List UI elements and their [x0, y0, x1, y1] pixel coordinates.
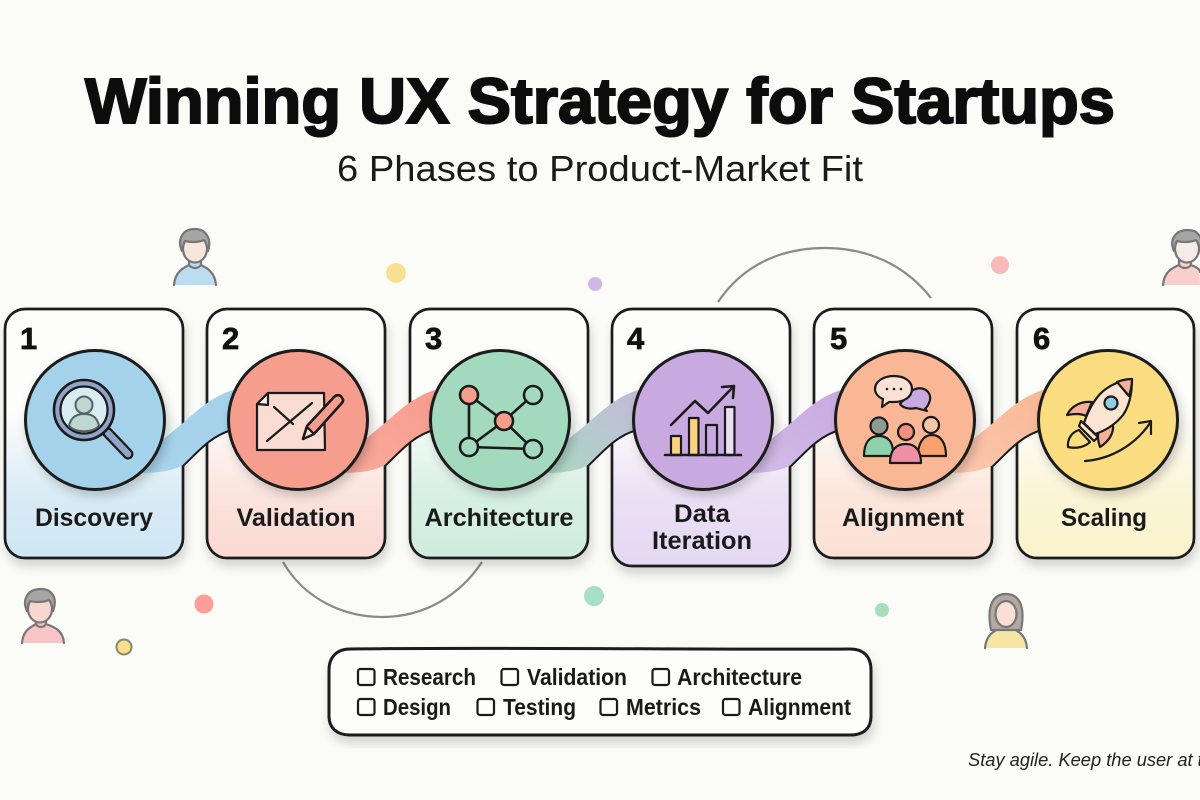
checklist item Architecture: Architecture — [677, 664, 802, 690]
panel: phase 1 discovery — [5, 309, 183, 558]
user avatar bottom left — [22, 589, 64, 643]
accent dots — [116, 256, 1009, 654]
label: Discovery: Discovery — [35, 504, 153, 532]
decorative arc bottom — [283, 562, 482, 617]
step number 5: 5 — [830, 321, 847, 356]
icon: validation document and pencil — [228, 350, 368, 490]
panel: phase 3 architecture — [410, 309, 588, 558]
label: Scaling: Scaling — [1061, 504, 1147, 532]
connector ribbon 5 to 6 — [950, 388, 1050, 473]
checklist item Validation: Validation — [527, 664, 627, 690]
title: Winning UX Strategy for Startups — [85, 65, 1115, 137]
user avatar top left — [174, 229, 216, 285]
icon: alignment team and chat — [836, 350, 974, 490]
icon: data iteration bar chart — [634, 350, 772, 490]
user avatar top right — [1163, 230, 1200, 285]
step number 3: 3 — [425, 321, 442, 356]
connector ribbon 2 to 3 — [342, 388, 442, 473]
panel: phase 2 validation — [207, 309, 385, 558]
user avatar bottom right — [985, 594, 1027, 648]
connector ribbon 4 to 5 — [748, 388, 848, 473]
checklist item Testing — [478, 694, 576, 720]
panel: phase 6 scaling — [1017, 309, 1194, 558]
subtitle: 6 Phases to Product-Market Fit — [337, 148, 863, 189]
label: Data Iteration: Data — [674, 500, 731, 528]
step number 6: 6 — [1033, 321, 1050, 356]
icon: discovery magnifier — [26, 350, 164, 490]
checklist item Testing: Testing — [503, 694, 576, 720]
checklist item Research: Research — [383, 664, 476, 690]
step number 1: 1 — [20, 321, 37, 356]
connector ribbon 1 to 2 — [140, 388, 240, 473]
connector ribbon 3 to 4 — [545, 388, 645, 473]
decorative arc top — [718, 248, 931, 302]
icon: architecture network — [430, 350, 570, 490]
checklist item Metrics: Metrics — [626, 694, 701, 720]
panel: phase 5 alignment — [814, 309, 992, 558]
label: Architecture: Architecture — [424, 504, 574, 532]
label: Validation: Validation — [236, 504, 356, 532]
checklist item Design — [358, 694, 451, 720]
step number 2: 2 — [222, 321, 239, 356]
icon: scaling rocket — [1038, 350, 1178, 490]
checklist item Alignment: Alignment — [748, 694, 851, 720]
label: Alignment: Alignment — [842, 504, 965, 532]
step number 4: 4 — [627, 321, 645, 356]
checklist item Design: Design — [383, 694, 451, 720]
checklist panel — [329, 648, 871, 735]
label: Data Iteration: Iteration — [652, 527, 752, 555]
panel: phase 4 data iteration — [612, 309, 790, 566]
label: Data Iteration — [652, 500, 752, 555]
